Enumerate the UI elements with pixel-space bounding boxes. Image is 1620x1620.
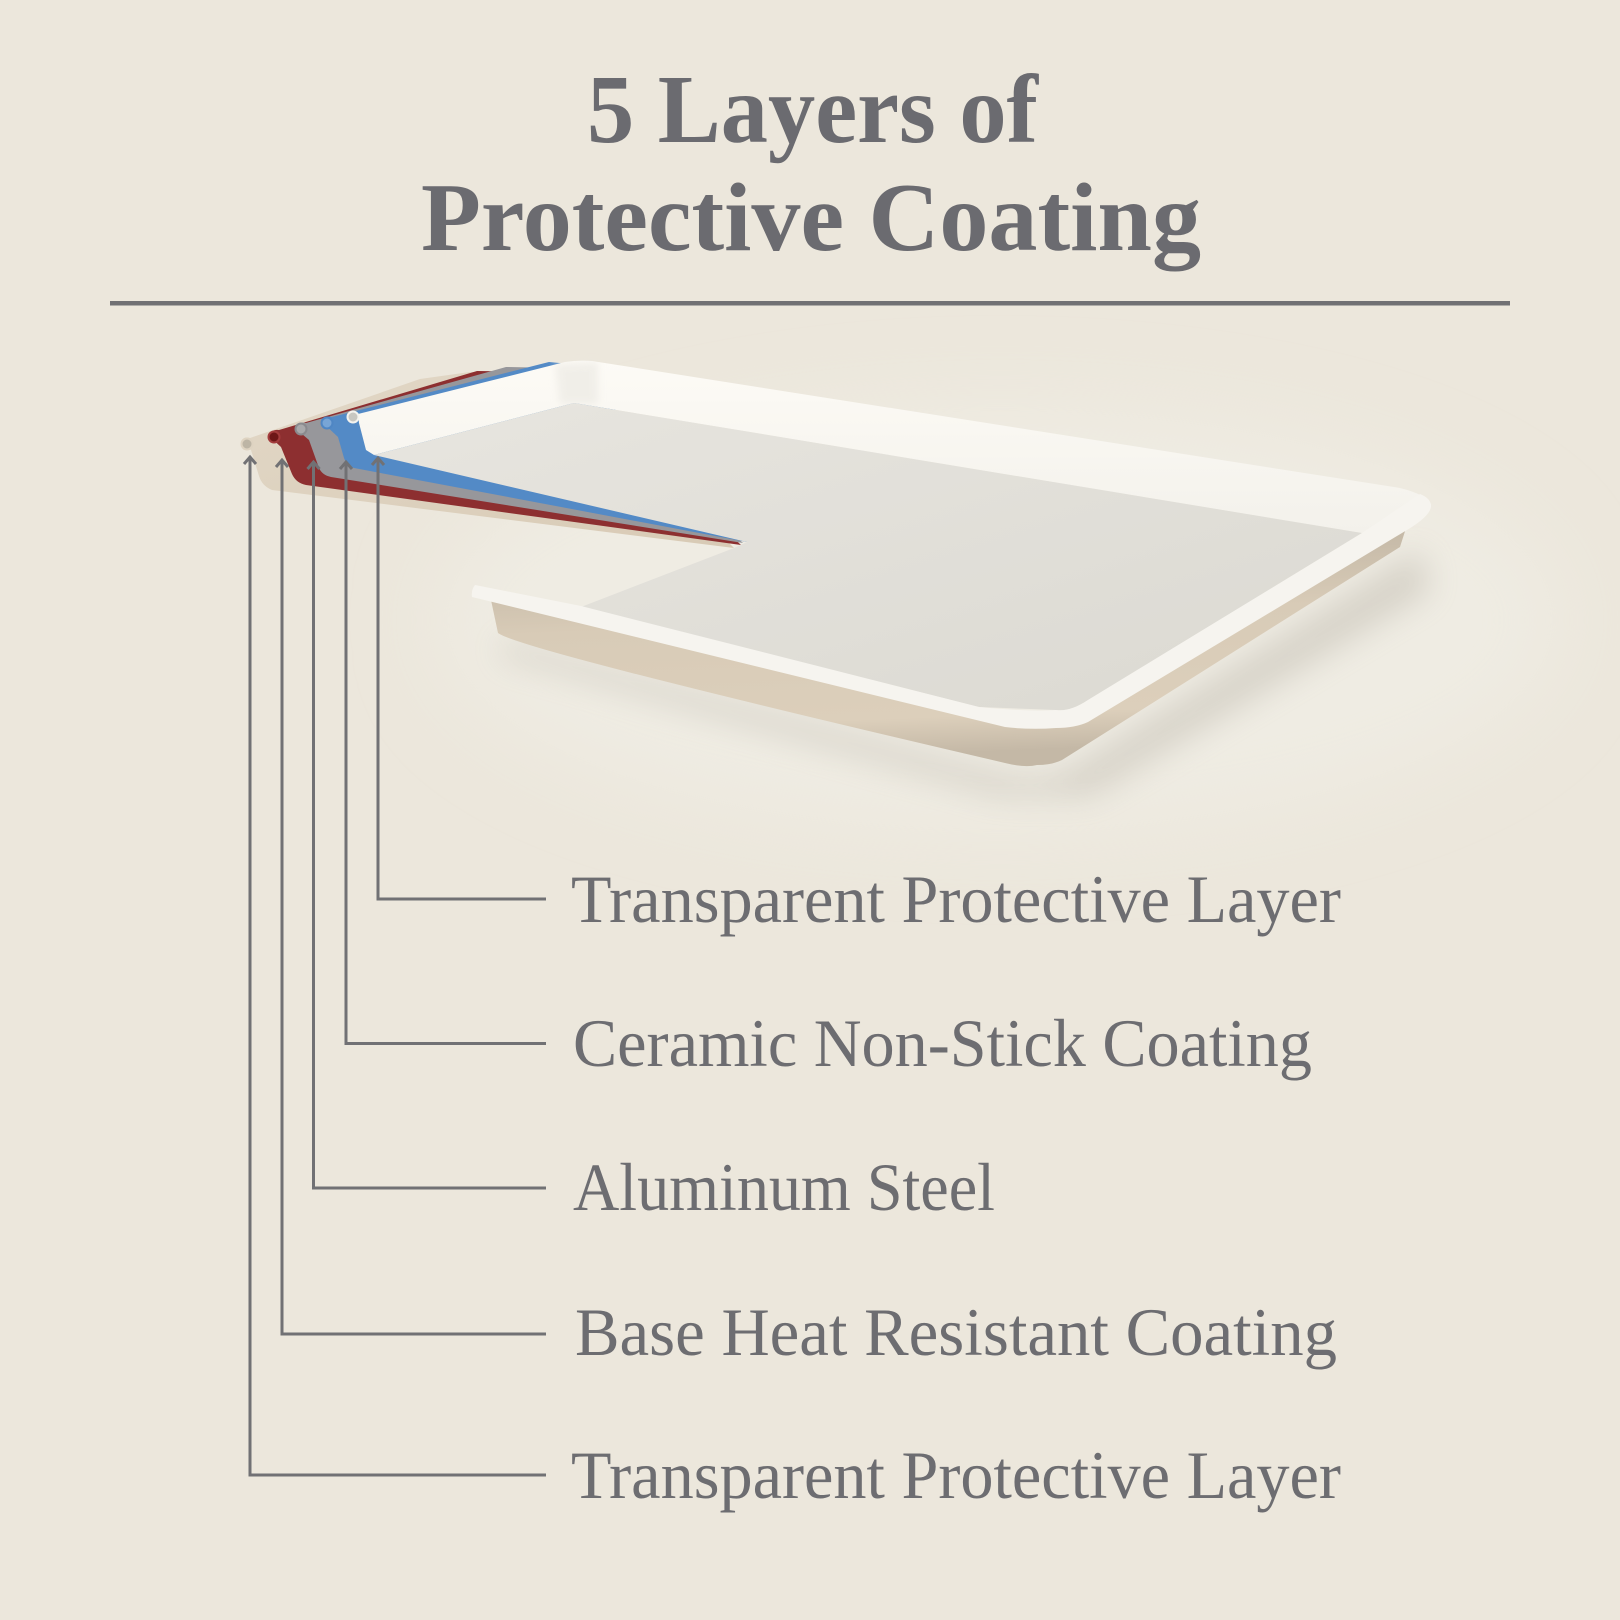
layer: tan transparent protective	[241, 372, 734, 548]
layer: gray aluminum	[295, 367, 743, 543]
tray floor	[374, 403, 1362, 710]
tray illustration	[241, 361, 1560, 830]
callout 5: transparent protective layer: Transparent Protective Layer	[571, 1437, 1341, 1513]
callout 4: base heat resistant coating	[276, 460, 1337, 1370]
title divider rule	[110, 301, 1510, 306]
tray underside in tan	[491, 525, 1407, 766]
layer: blue ceramic	[322, 362, 747, 542]
callout 3: aluminum steel: Aluminum Steel	[573, 1149, 995, 1225]
callout 1: transparent protective layer	[372, 458, 1341, 937]
layer: red heat resistant	[269, 371, 741, 545]
title: 5 Layers of	[587, 56, 1039, 164]
callout 2: ceramic non-stick coating	[340, 462, 1312, 1081]
tray back wall	[358, 361, 1431, 533]
callout 1: transparent protective layer: Transparent Protective Layer	[571, 861, 1341, 937]
tray front rim	[472, 494, 1431, 729]
callout 3: aluminum steel	[308, 462, 995, 1225]
back corner shading	[555, 362, 598, 404]
callout 5: transparent protective layer	[244, 457, 1341, 1513]
title	[421, 56, 1201, 272]
callout 2: ceramic non-stick coating: Ceramic Non-Stick Coating	[573, 1005, 1312, 1081]
title: Protective Coating	[421, 164, 1201, 272]
surface glow and shadow	[440, 410, 1560, 830]
layer tube ends	[242, 412, 358, 450]
callout 4: base heat resistant coating: Base Heat Resistant Coating	[575, 1294, 1337, 1370]
